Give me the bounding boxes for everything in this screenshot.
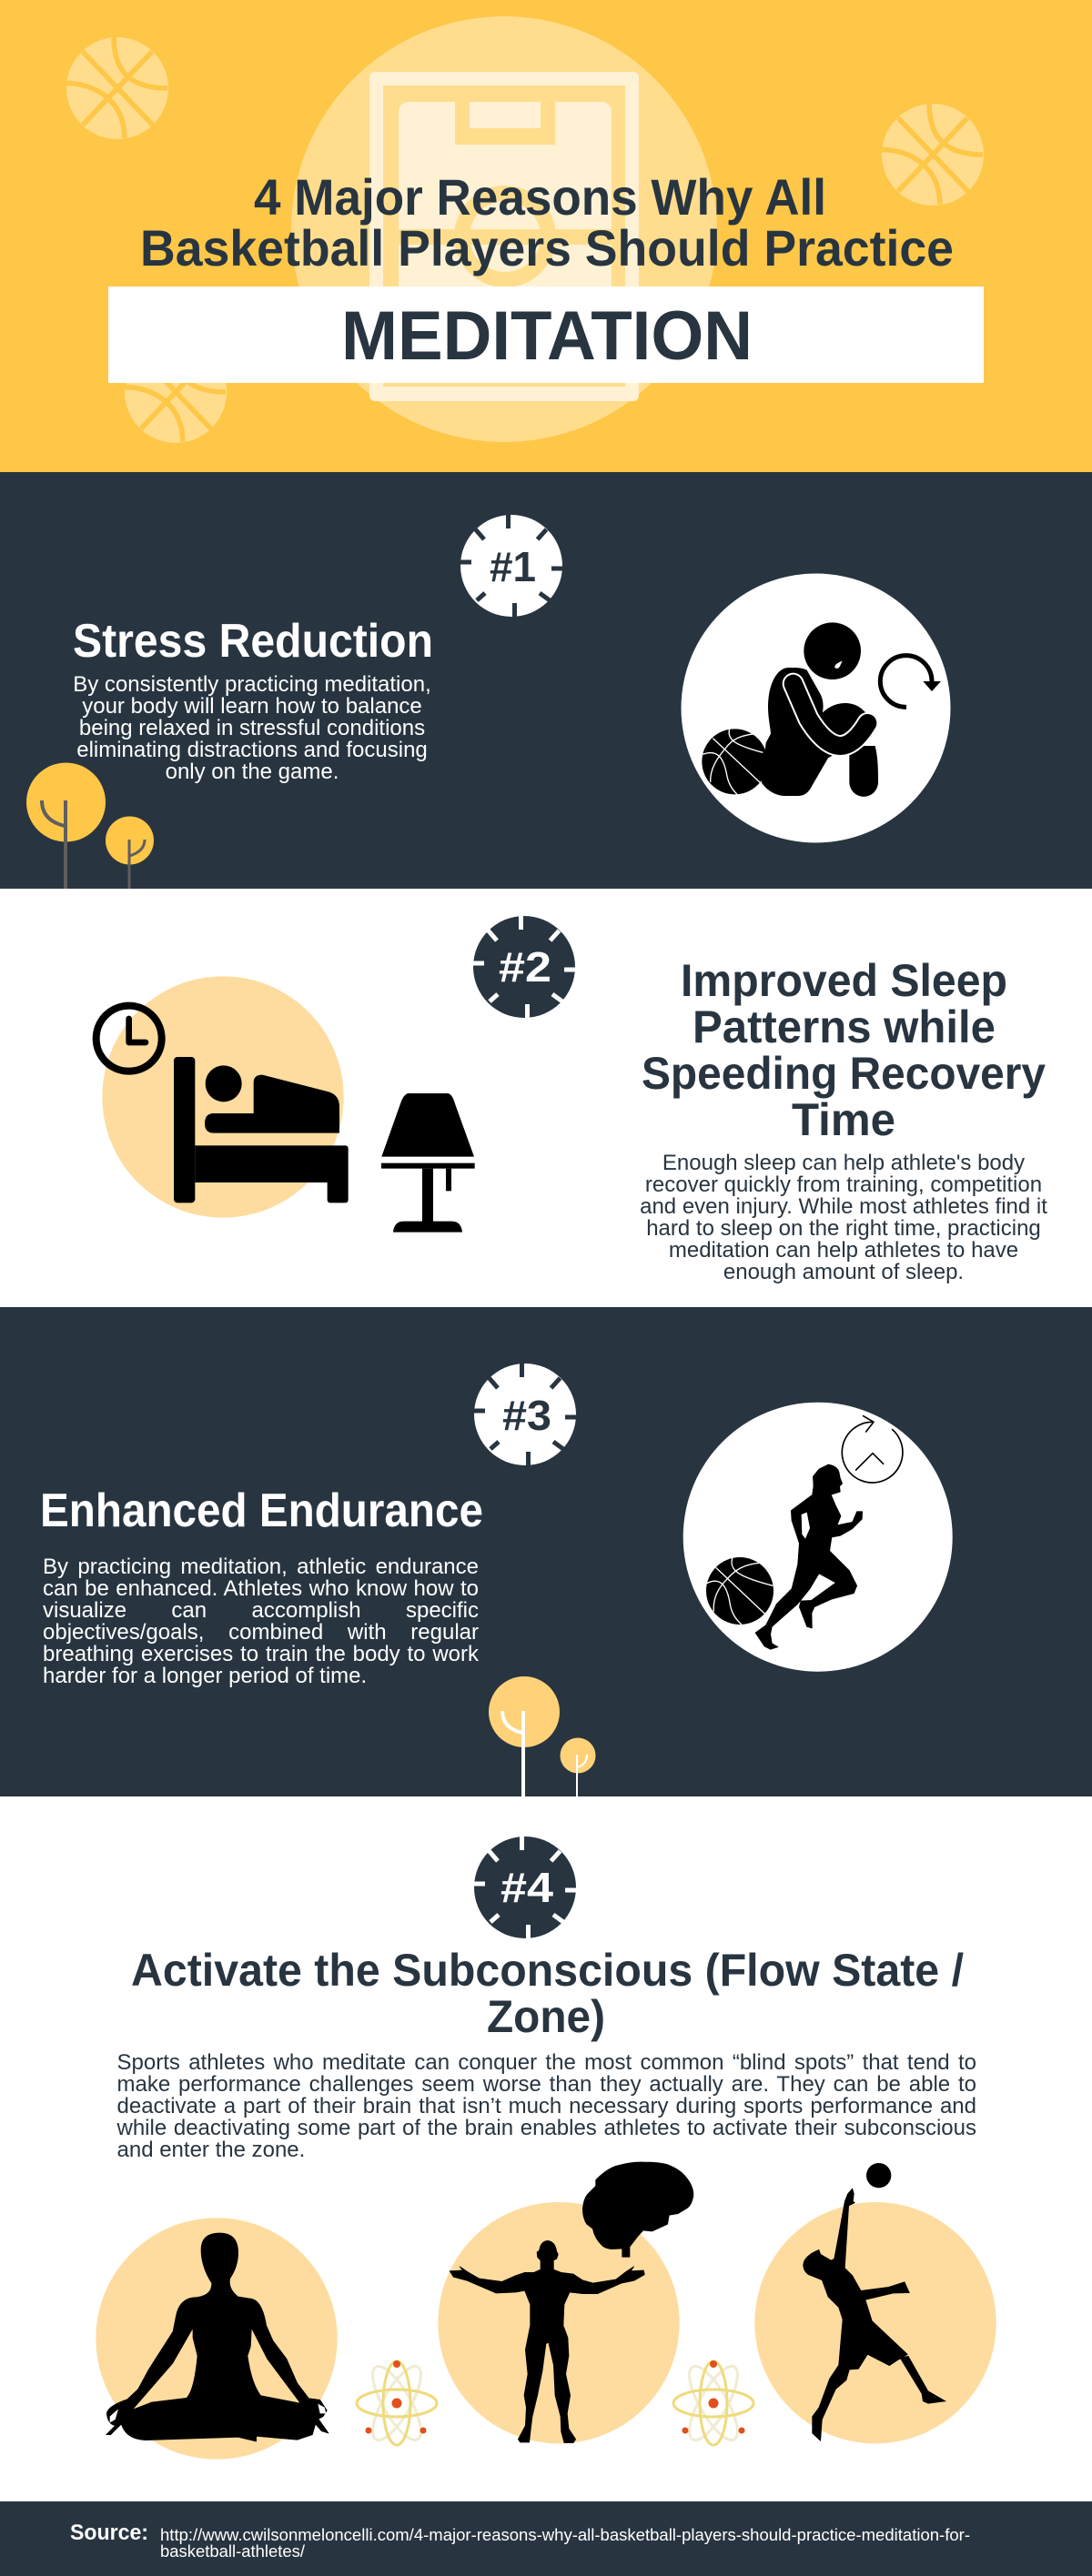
badge: #4 xyxy=(473,1836,577,1939)
body text: can be enhanced. Athletes who know how to xyxy=(43,1576,479,1601)
heading: Improved Sleep xyxy=(681,955,1007,1006)
heading xyxy=(131,1945,964,2042)
badge: #2 xyxy=(472,915,576,1019)
body text xyxy=(116,2050,976,2162)
head xyxy=(804,622,861,679)
panel: reason 4 activate the subconscious xyxy=(0,1796,1092,2501)
panel: reason 3 enhanced endurance xyxy=(0,1307,1092,1796)
body text: while deactivating some part of the brain enables athletes to activate their subconscious xyxy=(116,2116,976,2140)
circular arrow with chevron xyxy=(842,1416,903,1483)
brain xyxy=(583,2162,693,2257)
body text: hard to sleep on the right time, practicing xyxy=(646,1216,1041,1241)
illustration: bed clock and lamp xyxy=(96,976,475,1233)
source label: Source: xyxy=(70,2521,148,2545)
runner silhouette xyxy=(755,1464,863,1649)
basketball xyxy=(702,729,767,795)
source url xyxy=(160,2525,970,2561)
heading: Zone) xyxy=(487,1991,605,2042)
illustration: jumping player and ball xyxy=(754,2163,996,2443)
icon: atom right xyxy=(673,2360,753,2446)
icon: basketball top right xyxy=(882,104,984,206)
icon: basketball top left xyxy=(66,37,168,139)
rotation arrow xyxy=(880,656,941,707)
title banner xyxy=(108,287,984,383)
illustration: standing man with brain xyxy=(438,2162,693,2443)
arm gap xyxy=(802,1513,810,1539)
background circle xyxy=(291,16,717,442)
title: 4 Major Reasons Why All xyxy=(254,168,826,226)
source url: basketball-athletes/ xyxy=(160,2541,306,2561)
heading xyxy=(642,955,1046,1145)
tree large xyxy=(489,1676,560,1796)
badge: #3: #3 xyxy=(502,1392,551,1439)
icon circle white xyxy=(681,573,950,842)
badge: #1 xyxy=(460,514,563,618)
heading: Enhanced Endurance xyxy=(40,1484,483,1537)
body text: deactivate a part of their brain that isn’t much necessary during sports performance and xyxy=(116,2094,976,2118)
body text: make performance challenges seem worse than they actually are. They can be able to xyxy=(116,2072,976,2097)
title banner: MEDITATION xyxy=(341,297,753,375)
body text: By consistently practicing meditation, xyxy=(73,672,431,697)
panel: header xyxy=(0,0,1092,472)
icon circle white xyxy=(683,1403,953,1672)
leg xyxy=(849,746,878,797)
body text: harder for a longer period of time. xyxy=(43,1664,367,1688)
body text: enough amount of sleep. xyxy=(723,1260,964,1284)
heading: Speeding Recovery xyxy=(642,1048,1046,1099)
body text: visualize can accomplish specific xyxy=(43,1598,479,1623)
panel: reason 1 stress reduction xyxy=(0,472,1092,889)
badge: #2: #2 xyxy=(499,943,551,991)
icon: sad athlete with basketball xyxy=(702,622,941,797)
body text: meditation can help athletes to have xyxy=(669,1238,1018,1263)
icon: runner with basketball xyxy=(706,1416,903,1649)
arm gaps and hand holes xyxy=(110,2329,326,2422)
body text: and even injury. While most athletes find it xyxy=(640,1194,1047,1219)
tree large xyxy=(26,762,106,889)
badge: #3 xyxy=(473,1363,577,1466)
tree small xyxy=(561,1737,595,1796)
tree small xyxy=(106,817,154,889)
icon: basketball court xyxy=(369,72,639,401)
heading: Activate the Subconscious (Flow State / xyxy=(131,1945,964,1996)
body text: and enter the zone. xyxy=(116,2138,305,2162)
badge: #1: #1 xyxy=(490,543,536,590)
body text: breathing exercises to train the body to work xyxy=(43,1642,479,1666)
badge: #4: #4 xyxy=(500,1864,553,1911)
heading: Patterns while xyxy=(693,1001,996,1052)
body text xyxy=(640,1151,1047,1284)
body text xyxy=(73,672,431,784)
illustration: meditating figure xyxy=(96,2218,338,2460)
torso xyxy=(762,668,867,796)
title xyxy=(140,168,954,277)
heading: Stress Reduction xyxy=(73,615,433,668)
body text: Sports athletes who meditate can conquer the most common “blind spots” that tend to xyxy=(116,2050,976,2075)
body text: By practicing meditation, athletic endurance xyxy=(43,1555,479,1579)
arm xyxy=(794,684,867,746)
panel: reason 2 improved sleep xyxy=(0,889,1092,1307)
body text: only on the game. xyxy=(166,760,339,784)
body text: your body will learn how to balance xyxy=(82,694,422,719)
body text: eliminating distractions and focusing xyxy=(76,738,428,762)
peach circle xyxy=(102,976,344,1218)
body text: recover quickly from training, competition xyxy=(645,1172,1042,1197)
icon: lamp xyxy=(381,1093,475,1233)
panel: source footer xyxy=(0,2501,1092,2576)
body text: Enough sleep can help athlete's body xyxy=(662,1151,1025,1175)
title: Basketball Players Should Practice xyxy=(140,219,954,277)
icon: atom left xyxy=(357,2360,437,2446)
heading: Time xyxy=(792,1094,895,1145)
icon: basketball bottom left xyxy=(125,341,227,443)
basketball xyxy=(706,1557,774,1625)
icon: clock xyxy=(96,1006,162,1072)
body text: objectives/goals, combined with regular xyxy=(43,1620,479,1645)
source url: http://www.cwilsonmeloncelli.com/4-major-reasons-why-all-basketball-players-should-practice-meditation-for- xyxy=(160,2525,970,2544)
body text xyxy=(43,1555,479,1688)
body text: being relaxed in stressful conditions xyxy=(79,716,425,740)
icon: bed with sleeper xyxy=(174,1057,349,1202)
